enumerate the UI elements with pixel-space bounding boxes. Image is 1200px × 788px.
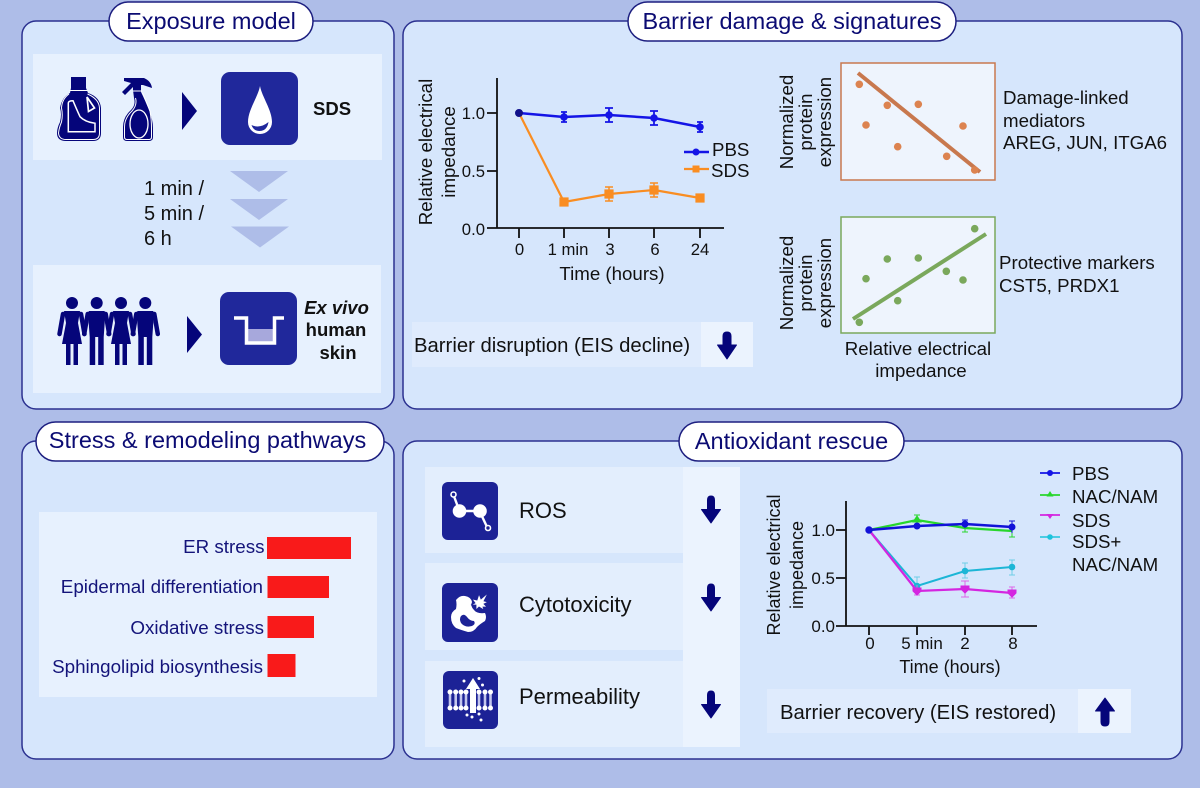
line chart: EIS PBS vs SDS: impedance [438, 106, 459, 198]
row: permeability: Permeability [519, 684, 640, 709]
bar chart: pathways: Epidermal differentiation [61, 576, 263, 597]
icon: down arrow [718, 332, 736, 359]
heading: exposure model [109, 2, 313, 41]
line chart: antioxidant rescue: Relative electrical [764, 494, 784, 636]
icon: damaged cell [442, 583, 498, 642]
axis label: top scatter: expression [814, 77, 835, 167]
axis label: bottom scatter: protein [795, 254, 816, 312]
callout: barrier recovery: Barrier recovery (EIS restored) [780, 702, 1056, 724]
axis label: shared x axis: impedance [875, 360, 967, 381]
label: ex vivo human skin: skin [319, 342, 357, 363]
axis label: bottom scatter [776, 236, 835, 330]
callout: barrier recovery [767, 689, 1131, 733]
arrow: detergent to SDS [182, 92, 197, 130]
heading: stress and remodeling pathways: Stress & remodeling pathways [49, 427, 366, 453]
icon: down arrow [702, 496, 720, 523]
line chart: antioxidant rescue: Time (hours) [899, 657, 1001, 677]
panel: antioxidant rescue [403, 422, 1182, 759]
axis label: top scatter [776, 75, 835, 169]
line chart: EIS PBS vs SDS: 24 [691, 240, 709, 259]
line chart: antioxidant rescue: impedance [787, 521, 807, 609]
legend: rescue chart: NAC/NAM [1072, 486, 1158, 507]
axis label: bottom scatter: Normalized [776, 236, 797, 330]
label: ex vivo human skin: human [306, 319, 366, 340]
line chart: EIS PBS vs SDS: Relative electrical [415, 79, 436, 225]
row: cytotoxicity: Cytotoxicity [519, 592, 631, 617]
legend: rescue chart: SDS [1072, 510, 1110, 531]
text: exposure durations [144, 178, 204, 250]
legend: rescue chart: SDS+ [1072, 531, 1121, 552]
icon: up arrow [1096, 698, 1114, 726]
series: SDS [519, 113, 704, 206]
legend: rescue chart [1040, 463, 1158, 575]
line chart: EIS PBS vs SDS: 0 [515, 240, 524, 259]
series: PBS [516, 108, 703, 132]
icon: skin culture well [220, 292, 297, 365]
heading: antioxidant rescue [679, 422, 904, 461]
axis label: top scatter: protein [795, 93, 816, 151]
label: ex vivo human skin [304, 297, 369, 363]
icon: down arrow [702, 691, 720, 718]
axis label: top scatter: Normalized [776, 75, 797, 169]
row: cytotoxicity [425, 563, 720, 650]
line chart: EIS PBS vs SDS: 3 [605, 240, 615, 259]
heading: exposure model: Exposure model [126, 8, 296, 34]
icon: ROS molecule [442, 482, 498, 540]
line chart: antioxidant rescue: 8 [1008, 634, 1018, 653]
line chart: EIS PBS vs SDS: 0.0 [462, 220, 485, 239]
line chart: EIS PBS vs SDS: 1.0 [462, 104, 485, 123]
text: damage-linked mediators: mediators [1003, 110, 1085, 131]
line chart: EIS PBS vs SDS: 6 [650, 240, 660, 259]
series: SDS [869, 530, 1016, 598]
line chart: antioxidant rescue: 0 [865, 634, 875, 653]
heading: antioxidant rescue: Antioxidant rescue [695, 428, 888, 454]
line chart: EIS PBS vs SDS: 1 min [548, 240, 588, 259]
callout: barrier disruption [412, 322, 753, 367]
label: SDS: SDS [313, 98, 351, 119]
line chart: antioxidant rescue: 2 [960, 634, 970, 653]
text: protective markers: CST5, PRDX1 [999, 275, 1119, 296]
line chart: antioxidant rescue: 5 min [901, 634, 943, 653]
line chart: antioxidant rescue: 0.5 [811, 569, 835, 588]
row: ROS: ROS [519, 498, 567, 523]
text: protective markers [999, 252, 1155, 296]
text: damage-linked mediators: AREG, JUN, ITGA6 [1003, 132, 1167, 153]
icon: droplet [221, 72, 298, 145]
panel: exposure model [22, 2, 394, 409]
series: SDS+NAC/NAM [869, 530, 1015, 595]
row: ROS [425, 467, 720, 553]
text: exposure durations: 6 h [144, 228, 172, 250]
text: protective markers: Protective markers [999, 252, 1155, 273]
axis label: shared x axis [845, 338, 991, 381]
label: ex vivo human skin: Ex vivo [304, 297, 369, 318]
line chart: EIS PBS vs SDS: Time (hours) [559, 263, 665, 284]
heading: barrier damage and signatures: Barrier damage & signatures [642, 8, 942, 34]
scatter plot: damage-linked mediators [841, 63, 995, 180]
series: NAC/NAM [869, 515, 1015, 537]
box: detergent to SDS [33, 54, 382, 160]
line chart: antioxidant rescue: 1.0 [811, 521, 835, 540]
row: permeability [425, 661, 720, 747]
panel: stress and remodeling pathways [22, 422, 394, 759]
legend: line chart: PBS [712, 139, 749, 160]
axis label: bottom scatter: expression [814, 238, 835, 328]
icon: spray bottle [122, 78, 153, 141]
legend: line chart: SDS [711, 160, 749, 181]
line chart: antioxidant rescue [764, 494, 1037, 677]
heading: barrier damage and signatures [628, 2, 956, 41]
bar chart: pathways: Oxidative stress [130, 617, 264, 638]
callout: barrier disruption: Barrier disruption (EIS decline) [414, 335, 690, 357]
legend: line chart [684, 139, 749, 181]
icon: four people [60, 297, 158, 365]
legend: rescue chart: NAC/NAM [1072, 554, 1158, 575]
text: damage-linked mediators: Damage-linked [1003, 87, 1129, 108]
text: exposure durations: 1 min / [144, 178, 204, 200]
legend: rescue chart: PBS [1072, 463, 1109, 484]
box: donors to skin [33, 265, 381, 393]
background: arrow column [683, 467, 740, 747]
arrow: people to skin [187, 316, 202, 353]
line chart: EIS PBS vs SDS [415, 78, 749, 284]
arrows: downward chevrons [230, 171, 289, 248]
bar chart: pathways: Sphingolipid biosynthesis [52, 656, 263, 677]
icon: detergent bottle [57, 77, 101, 141]
series: PBS [866, 520, 1015, 533]
panel: barrier damage and signatures [403, 2, 1182, 409]
icon: down arrow [702, 584, 720, 611]
axis label: shared x axis: Relative electrical [845, 338, 991, 359]
text: damage-linked mediators [1003, 87, 1167, 153]
icon: permeable membrane [443, 671, 498, 729]
scatter plot: protective markers [841, 217, 995, 333]
line chart: EIS PBS vs SDS: 0.5 [462, 162, 485, 181]
line chart: antioxidant rescue: 0.0 [811, 617, 835, 636]
bar chart: pathways: ER stress [183, 536, 264, 557]
heading: stress and remodeling pathways [36, 422, 384, 461]
text: exposure durations: 5 min / [144, 203, 204, 225]
bar chart: pathways [39, 512, 377, 697]
